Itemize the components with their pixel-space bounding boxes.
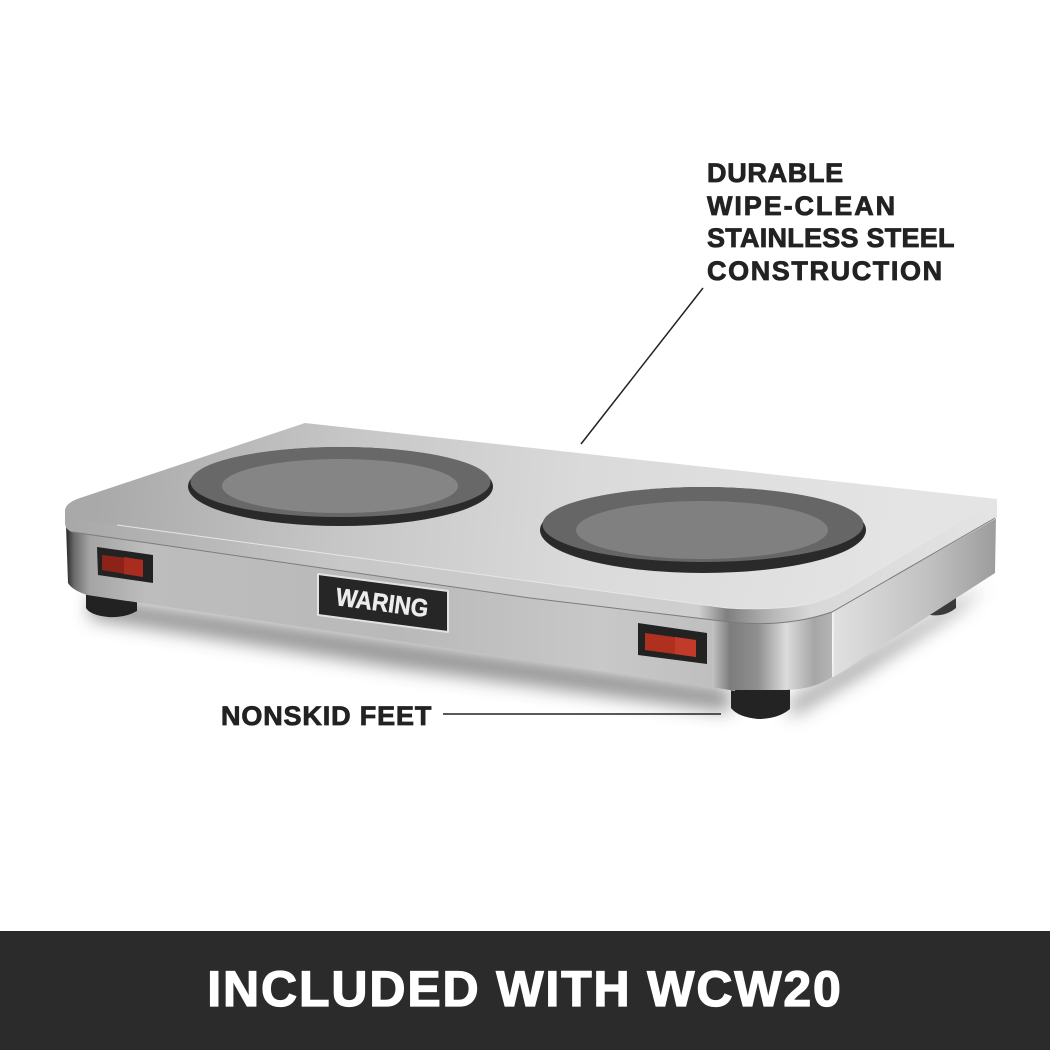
callout: stainless steel: WIPE-CLEAN [707, 190, 897, 220]
rounded front corner [712, 608, 833, 690]
leader line: stainless steel [581, 288, 703, 444]
right side panel [832, 516, 996, 677]
back right foot [928, 596, 956, 615]
callout: stainless steel: STAINLESS STEEL [707, 223, 955, 253]
floor shadow [90, 585, 985, 718]
front left foot [86, 590, 137, 617]
left power switch [97, 547, 153, 583]
banner title: INCLUDED WITH WCW20 [207, 961, 843, 1017]
brand badge [318, 574, 448, 632]
front right foot [731, 684, 790, 719]
brand badge: WARING [334, 583, 430, 623]
front panel [66, 525, 735, 691]
callout: stainless steel [706, 158, 955, 286]
right hot plate [540, 487, 866, 573]
callout: stainless steel: DURABLE [707, 158, 844, 188]
footer banner [0, 931, 1050, 1050]
callout: stainless steel: CONSTRUCTION [707, 256, 944, 286]
top surface [65, 423, 997, 609]
right power switch [638, 623, 707, 664]
top lip edge [65, 499, 997, 624]
callout: nonskid feet: NONSKID FEET [221, 701, 432, 731]
left hot plate [188, 447, 493, 526]
leader line: feet [443, 713, 721, 715]
